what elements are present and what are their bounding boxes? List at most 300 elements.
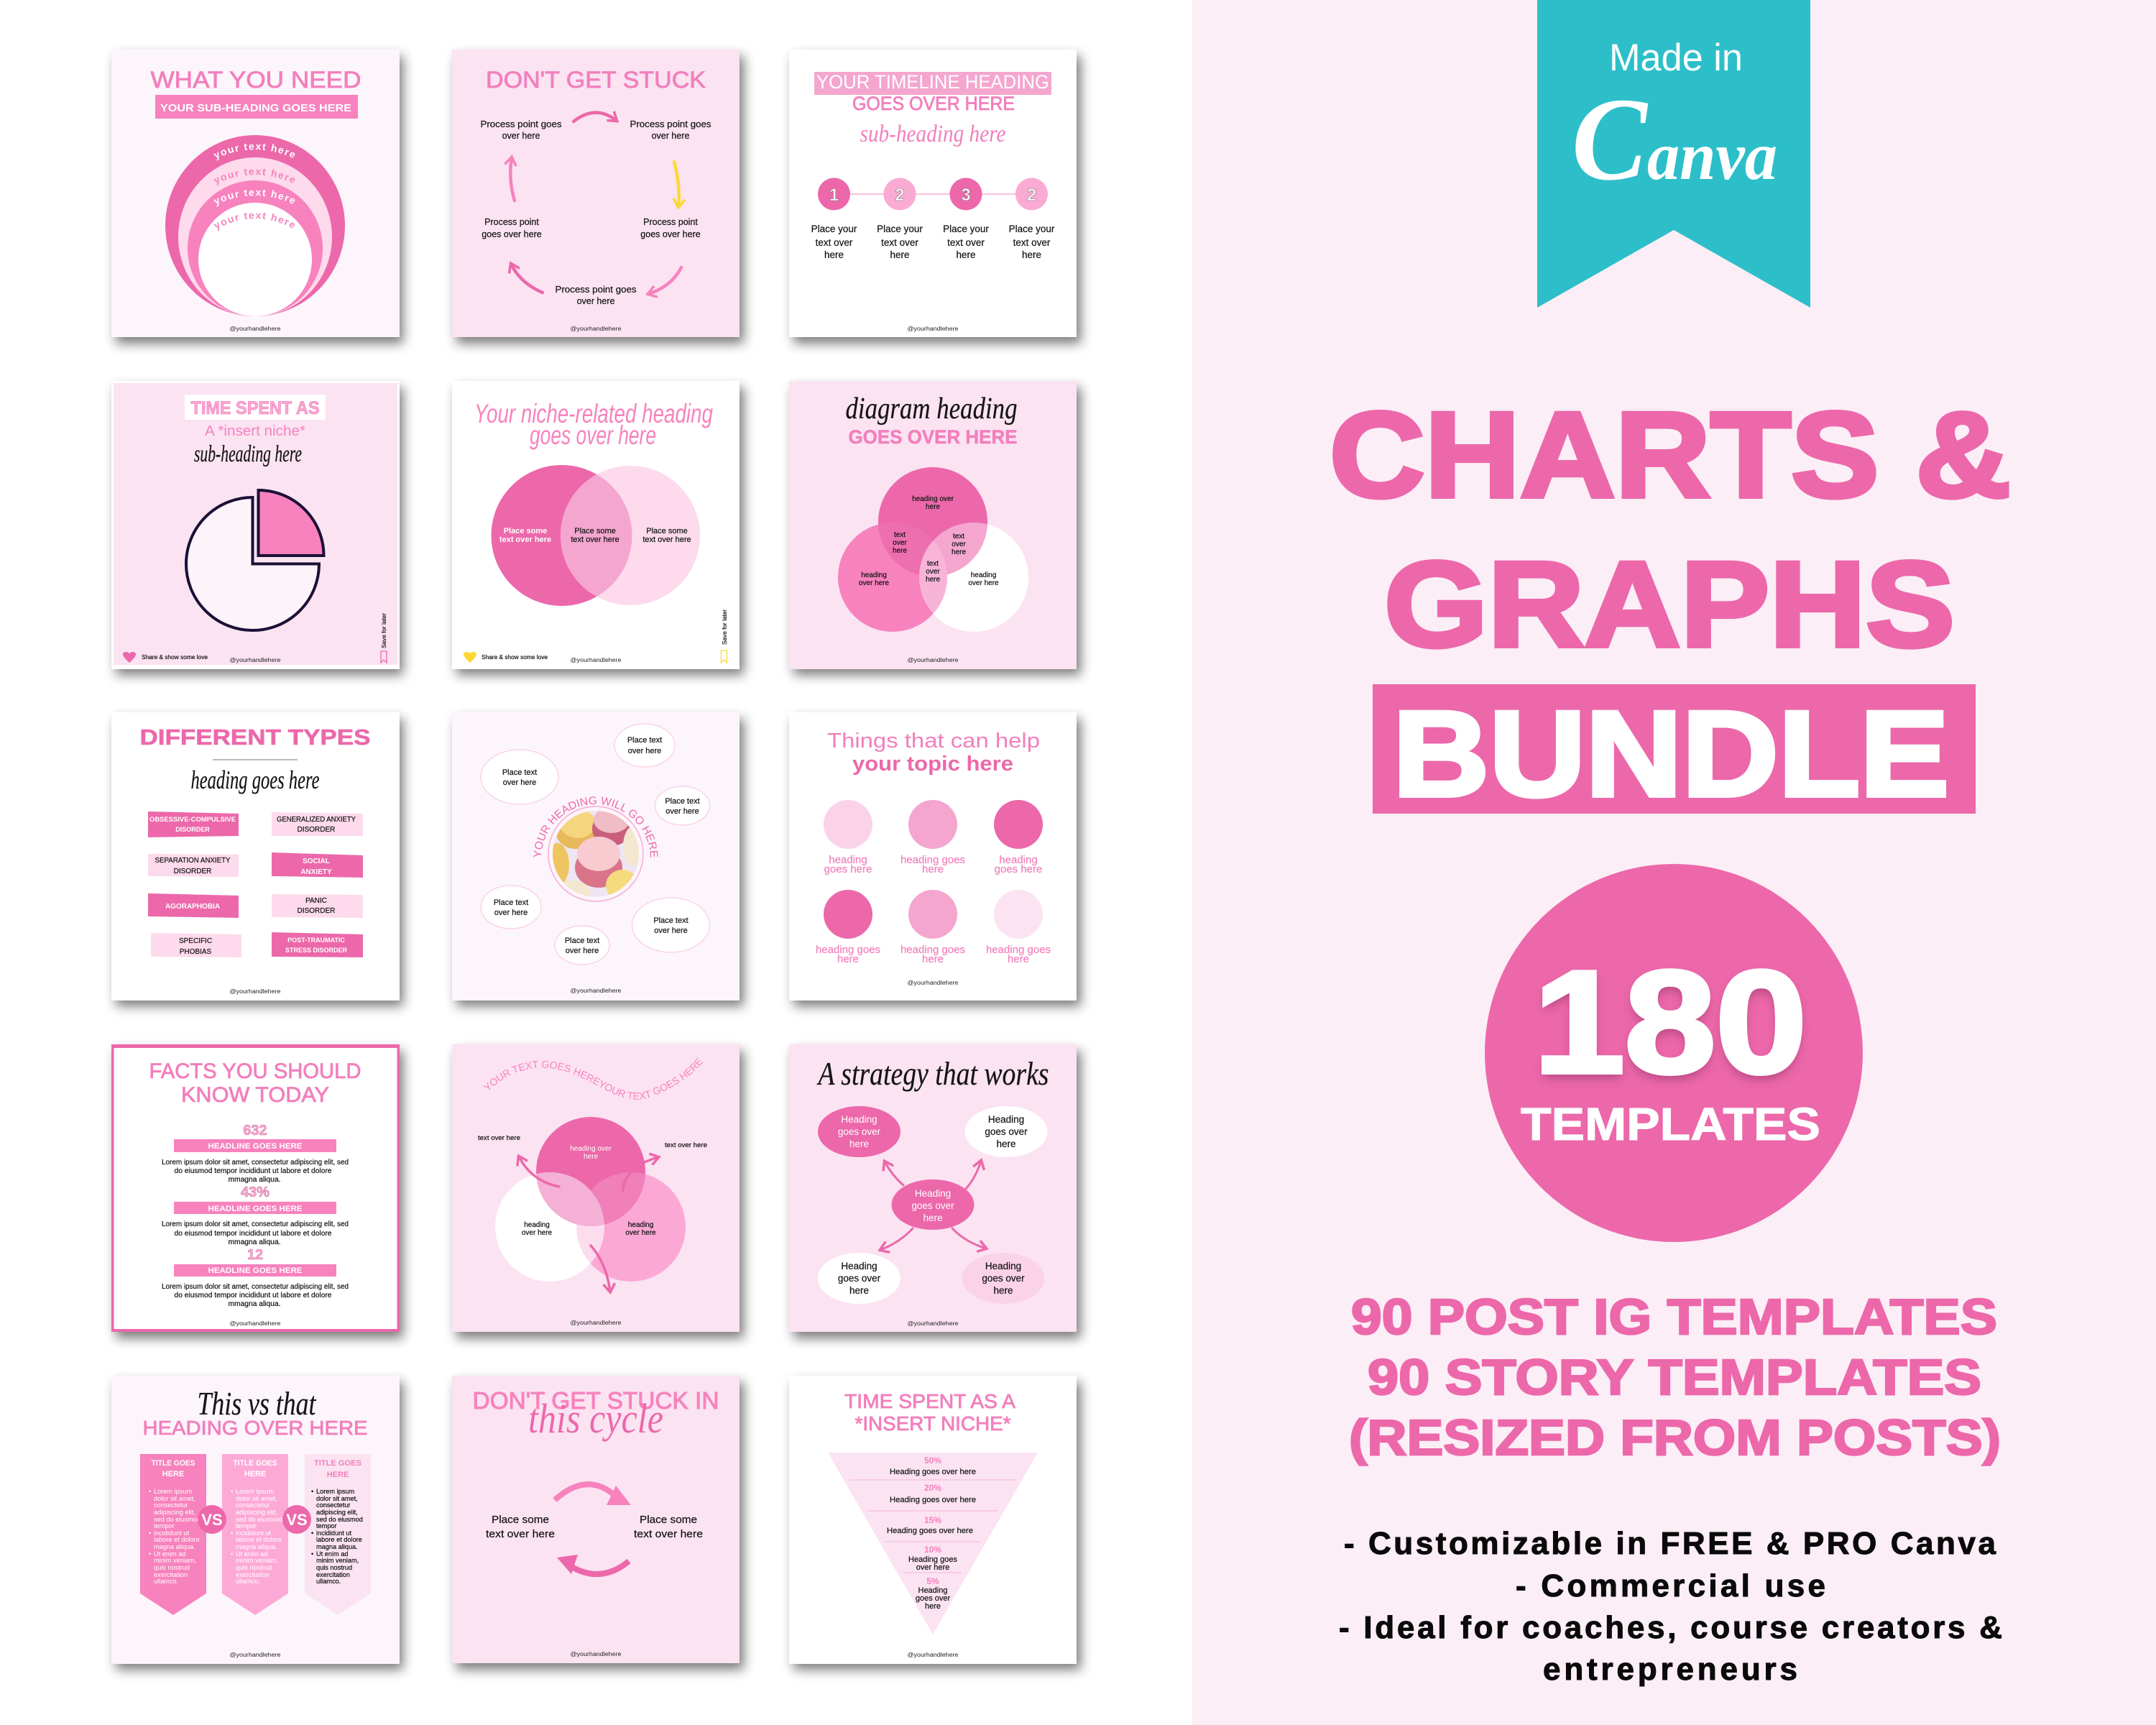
type labels grid: DISORDER (174, 868, 211, 875)
timeline heading bar: YOUR TIMELINE HEADING (816, 71, 1049, 93)
three circle venn: heading over (570, 1145, 612, 1153)
bubble labels (494, 736, 700, 955)
timeline labels: text over (816, 237, 853, 248)
column one: incididunt ut (154, 1530, 189, 1537)
column three: • (311, 1550, 313, 1558)
time spent heading box: TIME SPENT AS (191, 398, 319, 418)
column three: HERE (327, 1471, 349, 1479)
column one: • (149, 1530, 151, 1537)
handle: @yourhandlehere (571, 1320, 622, 1326)
timeline labels: Place your (811, 224, 857, 234)
column two: consectetur (236, 1501, 270, 1509)
handle: @yourhandlehere (230, 326, 281, 332)
funnel: Heading goes over here (890, 1496, 976, 1504)
column one: consectetur (154, 1501, 188, 1509)
type labels grid: OBSESSIVE-COMPULSIVE (149, 816, 236, 823)
feature list (1339, 1526, 2002, 1687)
script sub-heading: sub-heading here (194, 441, 302, 467)
dot labels (816, 854, 1051, 965)
venn diagram: Place some (574, 527, 616, 535)
cycle labels: Place some (492, 1514, 549, 1526)
column three: tempor (316, 1522, 337, 1530)
dot labels: heading goes (900, 944, 965, 956)
bubble labels: over here (628, 747, 661, 755)
column three (305, 1454, 371, 1615)
column three: magna aliqua. (316, 1543, 358, 1550)
panel: time spent pie (111, 381, 400, 669)
timeline labels: Place your (1009, 224, 1055, 234)
type labels grid: SPECIFIC (179, 937, 212, 945)
mind map arrows (880, 1161, 986, 1250)
type labels grid: DISORDER (298, 826, 335, 834)
script heading: heading goes here (191, 765, 320, 794)
mind map nodes: Heading (841, 1114, 877, 1125)
stat: 632: 632 (243, 1123, 267, 1138)
mind map nodes (818, 1106, 1048, 1304)
column two: • (231, 1550, 233, 1558)
callout labels: text over here (665, 1141, 707, 1149)
macaron photo illustration (545, 806, 645, 903)
timeline steps: 2 (895, 185, 905, 205)
script heading: This vs that (197, 1385, 316, 1422)
script sub-heading: sub-heading here (860, 121, 1006, 147)
nested arch chart: your text here (213, 190, 295, 207)
venn diagram: Place some (504, 527, 547, 535)
funnel: 50% (924, 1455, 941, 1466)
sub-heading bar: YOUR SUB-HEADING GOES HERE (160, 102, 351, 114)
column two: tempor (236, 1522, 257, 1530)
column two: TITLE GOES (233, 1459, 277, 1468)
column one: sed do eiusmod (154, 1516, 201, 1523)
process cycle labels: goes over here (482, 229, 542, 239)
type labels grid: PHOBIAS (180, 948, 212, 956)
cycle labels: text over here (634, 1528, 703, 1540)
timeline steps (818, 178, 1048, 210)
script heading: goes over here (530, 420, 656, 450)
bubble labels: Place text (502, 768, 537, 777)
mind map nodes: here (923, 1213, 943, 1223)
column three: labore et dolore (316, 1536, 362, 1543)
script heading: Your niche-related heading (474, 399, 713, 428)
handle: @yourhandlehere (571, 1651, 622, 1657)
mind map nodes: here (849, 1138, 869, 1149)
three circle venn: here (926, 576, 940, 584)
stat: 632: do eiusmod tempor incididunt ut labore et dolore (174, 1167, 332, 1175)
template counts: 90 STORY TEMPLATES (1368, 1349, 1981, 1405)
column three: consectetur (316, 1501, 351, 1509)
column three: sed do eiusmod (316, 1516, 363, 1523)
callout labels: text over here (478, 1134, 520, 1141)
column one: • (149, 1488, 151, 1495)
timeline labels: here (956, 249, 976, 260)
column two: HERE (244, 1470, 266, 1478)
mind map nodes: goes over (911, 1200, 954, 1211)
panel: don't get stuck (452, 50, 740, 337)
panel: facts you should know (111, 1044, 400, 1332)
heading: DON'T GET STUCK IN (473, 1387, 719, 1414)
funnel: Heading goes over here (887, 1527, 973, 1535)
timeline steps: 3 (961, 185, 971, 205)
handle: @yourhandlehere (230, 1652, 281, 1658)
badge: 180 templates: 180 (1534, 947, 1807, 1110)
handle: @yourhandlehere (230, 657, 281, 663)
dot labels: heading goes (986, 944, 1051, 956)
stat: 12: 12 (247, 1247, 263, 1263)
column one: tempor (154, 1522, 175, 1530)
stat: 43%: do eiusmod tempor incididunt ut labore et dolore (174, 1230, 332, 1238)
funnel: 10% (924, 1545, 941, 1555)
process cycle labels: Process point (484, 217, 539, 227)
timeline labels: here (1022, 249, 1041, 260)
three circle venn: text (953, 533, 964, 540)
heading line two: GOES OVER HERE (852, 93, 1015, 114)
column three: minim veniam, (316, 1557, 359, 1564)
nested arch chart: your text here (213, 144, 295, 161)
column one: exercitation (154, 1571, 188, 1578)
column one: adipiscing elit, (154, 1509, 195, 1516)
heading (844, 1390, 1015, 1435)
save for later: Save for later (380, 613, 387, 648)
feature list: - Ideal for coaches, course creators & (1339, 1610, 2002, 1645)
funnel: 15% (924, 1515, 941, 1525)
mind map nodes: Heading (841, 1261, 877, 1271)
three circle venn: heading over (912, 495, 954, 503)
heading line one: Things that can help (827, 730, 1040, 753)
panel: two circle venn (452, 381, 740, 669)
timeline steps: 1 (829, 185, 839, 205)
cycle labels: text over here (486, 1528, 555, 1540)
stat: 632 (162, 1123, 349, 1184)
script heading: A strategy that works (816, 1055, 1049, 1092)
three circle venn: text (927, 560, 939, 568)
mind map nodes: goes over (838, 1273, 881, 1284)
stat: 12: mmagna aliqua. (229, 1300, 280, 1308)
share text: Share & show some love (142, 654, 208, 661)
stat: 43%: Lorem ipsum dolor sit amet, consectetur adipiscing elit, sed (162, 1220, 349, 1228)
type labels grid: POST-TRAUMATIC (287, 937, 345, 944)
wavy heading: YOUR TEXT GOES HEREYOUR TEXT GOES HERE (483, 1058, 703, 1100)
heading: HEADING OVER HERE (142, 1417, 368, 1439)
template counts: (RESIZED FROM POSTS) (1349, 1409, 2001, 1466)
column three: exercitation (316, 1571, 350, 1578)
dot labels: goes here (824, 863, 872, 875)
stat: 43%: HEADLINE GOES HERE (208, 1205, 302, 1213)
timeline steps: 2 (1027, 185, 1036, 205)
venn diagram (492, 465, 700, 606)
three circle venn: text (894, 531, 906, 539)
column one (140, 1454, 206, 1615)
column three: adipiscing elit, (316, 1509, 358, 1516)
venn diagram: text over here (499, 535, 551, 544)
panel: strategy (789, 1044, 1077, 1332)
funnel: Heading (918, 1586, 947, 1595)
handle: @yourhandlehere (907, 980, 959, 986)
cycle labels (486, 1514, 703, 1540)
dot labels: heading goes (816, 944, 880, 956)
dot labels: here (837, 953, 859, 965)
nested arch chart (165, 135, 345, 316)
three circle venn: over here (859, 579, 890, 587)
save for later: Save for later (721, 610, 728, 645)
badge: 180 templates: 180 (1534, 941, 1807, 1104)
column three: • (311, 1530, 313, 1537)
three circle venn: heading (524, 1221, 550, 1229)
bubble labels: Place text (665, 797, 700, 806)
mind map nodes: here (849, 1285, 869, 1296)
column three: ullamco. (316, 1578, 341, 1585)
bubble labels: Place text (627, 736, 662, 745)
column one: quis nostrud (154, 1564, 190, 1571)
stat: 12: HEADLINE GOES HERE (208, 1266, 302, 1275)
share text: Share & show some love (482, 654, 548, 661)
three circle venn: over here (625, 1229, 656, 1237)
heading: don't get stuck: DON'T GET STUCK (486, 67, 706, 93)
timeline labels: Place your (943, 224, 989, 234)
heading: TIME SPENT AS A (844, 1390, 1015, 1412)
funnel: goes over (916, 1594, 950, 1603)
column two: ullamco. (236, 1578, 260, 1585)
handle: @yourhandlehere (571, 657, 622, 663)
process cycle labels: goes over here (640, 229, 701, 239)
nested arch chart: your text here (213, 168, 295, 185)
funnel (828, 1453, 1038, 1634)
sub-heading bar (155, 95, 358, 119)
column two: labore et dolore (236, 1536, 282, 1543)
stat: 632: mmagna aliqua. (229, 1176, 280, 1184)
cycle labels: Place some (640, 1514, 697, 1526)
mind map nodes: goes over (985, 1126, 1028, 1137)
vs badge two: VS (286, 1511, 308, 1529)
process cycle labels (480, 119, 711, 306)
column three: Ut enim ad (316, 1550, 348, 1558)
bubble labels: Place text (653, 916, 688, 925)
mind map nodes: here (993, 1285, 1013, 1296)
heading: *INSERT NICHE* (855, 1412, 1011, 1435)
column three: dolor sit amet, (316, 1495, 358, 1502)
funnel: here (925, 1602, 941, 1611)
type labels grid: DISORDER (175, 826, 210, 833)
bubble labels: over here (665, 807, 699, 816)
column three: quis nostrud (316, 1564, 352, 1571)
badge: 180 templates: TEMPLATES (1521, 1098, 1820, 1150)
panel: venn with arrows (452, 1044, 740, 1332)
column two: quis nostrud (236, 1564, 272, 1571)
template counts (1349, 1289, 2001, 1466)
bubble labels: Place text (494, 898, 528, 907)
column one: dolor sit amet, (154, 1495, 195, 1502)
three circle venn (495, 1117, 686, 1282)
script line: this cycle (528, 1395, 663, 1442)
panel: different types (111, 712, 400, 1000)
timeline labels: here (824, 249, 844, 260)
column one: Lorem ipsum (154, 1488, 192, 1495)
mind map nodes: Heading (915, 1188, 951, 1199)
column two: incididunt ut (236, 1530, 271, 1537)
bubble labels: over here (503, 778, 536, 787)
timeline labels (811, 224, 1055, 260)
process cycle labels: over here (502, 131, 540, 141)
type labels grid (148, 811, 363, 957)
venn diagram: Place some (646, 527, 688, 535)
mind map nodes: goes over (982, 1273, 1025, 1284)
three circle venn: over (893, 539, 907, 547)
handle: @yourhandlehere (230, 988, 281, 995)
canva ribbon: Made in (1609, 37, 1743, 79)
three circle venn: heading (628, 1221, 653, 1229)
timeline labels: here (890, 249, 910, 260)
type labels grid: DISORDER (298, 907, 335, 915)
outer bubbles (481, 724, 710, 965)
insert niche line: A *insert niche* (205, 423, 305, 439)
column two: dolor sit amet, (236, 1495, 277, 1502)
column two: • (231, 1530, 233, 1537)
badge: 180 templates (1485, 864, 1863, 1242)
feature list: - Commercial use (1516, 1568, 1825, 1604)
main title: charts & graphs: CHARTS & (1330, 387, 2011, 523)
vs badge one (198, 1505, 226, 1534)
mind map nodes: goes over (838, 1126, 881, 1137)
heading line two: your topic here (852, 753, 1013, 776)
dot labels: heading (829, 854, 867, 866)
column three: incididunt ut (316, 1530, 351, 1537)
funnel: Heading goes over here (890, 1468, 976, 1476)
type labels grid: GENERALIZED ANXIETY (277, 816, 356, 824)
funnel: 5% (926, 1576, 939, 1586)
process cycle labels: Process point goes (555, 285, 637, 295)
process cycle labels: over here (652, 131, 689, 141)
column one: labore et dolore (154, 1536, 200, 1543)
bubble labels: Place text (565, 937, 599, 945)
panel: hub bubbles (452, 712, 740, 1000)
dot labels: goes here (995, 863, 1042, 875)
bundle banner: BUNDLE (1393, 686, 1949, 822)
venn diagram: text over here (642, 535, 691, 544)
type labels grid: STRESS DISORDER (285, 947, 348, 954)
feature list: entrepreneurs (1543, 1652, 1797, 1687)
column two: adipiscing elit, (236, 1509, 277, 1516)
dot labels: here (1008, 953, 1029, 965)
heading: different types: DIFFERENT TYPES (139, 724, 371, 750)
column one: Ut enim ad (154, 1550, 185, 1558)
column one: • (149, 1550, 151, 1558)
stat: 43%: 43% (241, 1184, 270, 1200)
timeline labels: text over (947, 237, 985, 248)
three circle venn: heading (861, 571, 887, 579)
process cycle labels: Process point goes (630, 119, 711, 129)
timeline labels: Place your (877, 224, 923, 234)
callout labels (478, 1134, 707, 1149)
dot labels: heading (999, 854, 1038, 866)
heading (149, 1059, 361, 1107)
vs badge two (282, 1505, 311, 1534)
cycle arrows (510, 113, 681, 294)
column one: HERE (162, 1470, 184, 1478)
column two: magna aliqua. (236, 1543, 277, 1550)
feature list: - Customizable in FREE & PRO Canva (1344, 1526, 1996, 1561)
bubble labels: over here (566, 947, 599, 955)
script heading (474, 399, 713, 450)
column two: Ut enim ad (236, 1550, 267, 1558)
type labels grid: ANXIETY (300, 868, 332, 876)
timeline labels: text over (881, 237, 918, 248)
bottom arrow (557, 1555, 629, 1574)
top arrow (555, 1484, 631, 1505)
three circle venn: here (926, 503, 940, 511)
vs badge one: VS (201, 1511, 223, 1529)
curved heading: YOUR HEADING WILL GO HERE (533, 796, 658, 857)
column one: magna aliqua. (154, 1543, 195, 1550)
panel: this vs that (111, 1376, 400, 1664)
dot labels: here (922, 863, 944, 875)
canva ribbon: Canva (1572, 73, 1777, 205)
column two: sed do eiusmod (236, 1516, 282, 1523)
type labels grid: PANIC (305, 897, 327, 905)
stat: 12: Lorem ipsum dolor sit amet, consectetur adipiscing elit, sed (162, 1283, 349, 1291)
type labels grid: SEPARATION ANXIETY (155, 857, 231, 865)
funnel: over here (916, 1563, 949, 1572)
type labels grid: SOCIAL (303, 857, 330, 865)
colour dots (824, 800, 1043, 939)
funnel: Heading goes (908, 1555, 957, 1564)
bold heading: GOES OVER HERE (848, 426, 1018, 448)
icon: bookmark (722, 650, 727, 663)
icon: heart (123, 652, 136, 663)
three circle venn: here (893, 547, 907, 555)
panel: stuck in this cycle (452, 1376, 740, 1663)
column three: TITLE GOES (314, 1459, 361, 1468)
three circle venn: over here (968, 579, 999, 587)
column three: Lorem ipsum (316, 1488, 354, 1495)
right panel background (1192, 0, 2156, 1725)
panel: timeline (789, 50, 1077, 337)
mind map nodes: Heading (985, 1261, 1021, 1271)
dot labels: here (922, 953, 944, 965)
process cycle labels: Process point (643, 217, 698, 227)
main title: charts & graphs: GRAPHS (1384, 536, 1955, 672)
handle: @yourhandlehere (907, 326, 959, 332)
type labels grid: AGORAPHOBIA (165, 903, 220, 911)
stat: 632: HEADLINE GOES HERE (208, 1142, 302, 1151)
pie chart (186, 490, 323, 630)
column one: ullamco. (154, 1578, 178, 1585)
timeline labels: text over (1013, 237, 1051, 248)
nested arch chart: your text here (213, 213, 295, 231)
heading: KNOW TODAY (181, 1083, 329, 1107)
icon: bookmark (381, 651, 387, 663)
handle: @yourhandlehere (571, 326, 622, 332)
heading: what you need: WHAT YOU NEED (151, 67, 361, 93)
script heading: diagram heading (845, 392, 1018, 426)
funnel: 20% (924, 1483, 941, 1493)
handle: @yourhandlehere (907, 1652, 959, 1658)
arrows (519, 1156, 658, 1292)
three circle venn: here (584, 1153, 598, 1161)
stat: 43% (162, 1184, 349, 1246)
stat: 12: do eiusmod tempor incididunt ut labore et dolore (174, 1292, 332, 1300)
three circle venn: here (952, 548, 966, 556)
column three: • (311, 1488, 313, 1495)
handle: @yourhandlehere (230, 1320, 281, 1327)
panel: what you need (111, 50, 400, 337)
stat: 632: Lorem ipsum dolor sit amet, consectetur adipiscing elit, sed (162, 1159, 349, 1167)
panel: three circle diagram (789, 381, 1077, 669)
panel: things that can help (789, 712, 1077, 1000)
three circle venn: over here (522, 1229, 553, 1237)
heading: FACTS YOU SHOULD (149, 1059, 361, 1083)
column two (222, 1454, 288, 1615)
handle: @yourhandlehere (907, 657, 959, 663)
bubble labels: over here (494, 908, 528, 917)
